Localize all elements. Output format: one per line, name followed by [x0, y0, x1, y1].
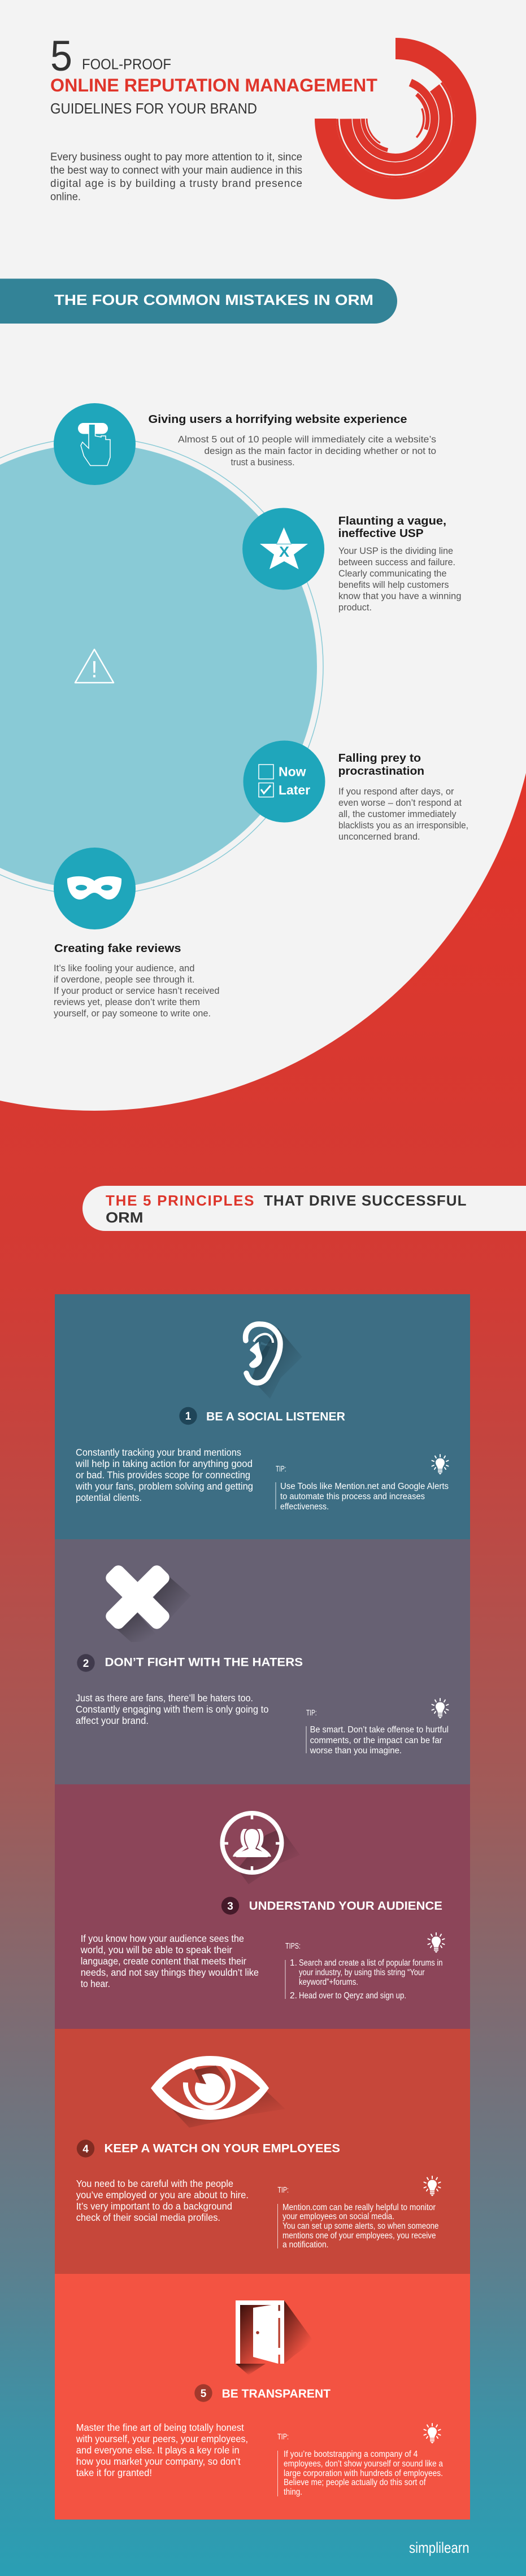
- tip 5: Believe me; people actually do this sort of: [284, 2478, 426, 2487]
- tips 3: TIPS:: [285, 1942, 301, 1951]
- mistake 4: fake reviews: reviews yet, please don’t write them: [54, 997, 200, 1007]
- tips 3: [285, 1933, 444, 2001]
- tip 5: employees, don’t show yourself or sound like a: [284, 2459, 443, 2469]
- icon: red concentric arcs: [325, 49, 466, 189]
- tip 2: worse than you imagine.: [310, 1746, 402, 1756]
- mistake 4: fake reviews: if overdone, people see through it.: [54, 974, 194, 985]
- tip 5: [277, 2424, 443, 2497]
- tip 1: Use Tools like Mention.net and Google Alerts: [280, 1482, 449, 1491]
- big light-blue circle: [0, 444, 317, 889]
- mistake 4: fake reviews: Creating fake reviews: [54, 942, 181, 955]
- tip 4: [277, 2176, 441, 2250]
- mistake 3: procrastination: even worse – don’t respond at: [338, 797, 462, 808]
- tip 2: comments, or the impact can be far: [310, 1736, 442, 1745]
- panel: understand your audience: [55, 1784, 470, 2029]
- intro text: the best way to connect with your main audience in this: [50, 165, 302, 176]
- body 4: It’s very important to do a background: [76, 2200, 232, 2212]
- section banner: four common mistakes: THE FOUR COMMON MISTAKES IN ORM: [54, 291, 373, 308]
- body 1: potential clients.: [76, 1492, 142, 1503]
- icon circle: now later checkboxes: Later: [279, 783, 310, 797]
- body 4: You need to be careful with the people: [76, 2178, 233, 2189]
- mistake 2: vague USP: product.: [338, 602, 372, 613]
- mistake 1: website experience: Giving users a horrifying website experience: [148, 413, 407, 426]
- title: ONLINE REPUTATION MANAGEMENT: [50, 75, 377, 95]
- body 1: will help in taking action for anything good: [75, 1458, 253, 1469]
- number badge 2: [77, 1654, 95, 1672]
- tips 3: Search and create a list of popular forums in: [299, 1958, 443, 1968]
- body 2: Constantly engaging with them is only going to: [76, 1704, 269, 1715]
- title: [50, 32, 377, 117]
- title: GUIDELINES FOR YOUR BRAND: [50, 100, 257, 117]
- title: 5: [50, 32, 72, 80]
- number badge 1: 1: [185, 1411, 192, 1422]
- mistake 2: vague USP: benefits will help customers: [338, 579, 449, 590]
- mistake 3: procrastination: [338, 752, 468, 842]
- body 2: affect your brand.: [76, 1715, 149, 1726]
- body 3: needs, and not say things they wouldn’t like: [81, 1967, 259, 1978]
- light upper background: [0, 0, 526, 1111]
- number badge 1: [179, 1407, 197, 1425]
- body 4: [76, 2178, 249, 2223]
- mistake 4: fake reviews: If your product or service hasn’t received: [54, 985, 219, 996]
- icon: open door: [236, 2300, 314, 2375]
- mistake 1: website experience: design as the main factor in deciding whether or not to: [205, 446, 436, 456]
- tip 2: TIP:: [306, 1709, 316, 1718]
- icon: target audience: [221, 1813, 300, 1884]
- icon: warning triangle: [75, 649, 114, 683]
- outer ring of big circle: [0, 438, 323, 895]
- tip 1: TIP:: [276, 1465, 286, 1474]
- mistake 3: procrastination: procrastination: [338, 765, 424, 778]
- tips 3: Head over to Qeryz and sign up.: [299, 1991, 406, 2001]
- tip 5: large corporation with hundreds of employees.: [284, 2469, 443, 2478]
- mistake 2: vague USP: Clearly communicating the: [338, 568, 446, 579]
- title: FOOL-PROOF: [82, 55, 171, 72]
- tip 5: thing.: [284, 2487, 302, 2497]
- number badge 5: [194, 2384, 212, 2402]
- section banner: five principles: THAT DRIVE SUCCESSFUL: [264, 1192, 467, 1209]
- body 5: how you market your company, so don’t: [76, 2456, 241, 2467]
- body 4: check of their social media profiles.: [76, 2212, 220, 2223]
- tips 3: 1.: [290, 1958, 297, 1968]
- number badge 4: 4: [82, 2143, 89, 2155]
- body 5: Master the fine art of being totally honest: [76, 2422, 244, 2433]
- tip 4: You can set up some alerts, so when someone: [282, 2221, 438, 2231]
- tip 2: Be smart. Don’t take offense to hurtful: [310, 1725, 449, 1735]
- number badge 2: 2: [83, 1658, 89, 1670]
- body 3: If you know how your audience sees the: [81, 1933, 244, 1944]
- heading 2: DON’T FIGHT WITH THE HATERS: [105, 1656, 303, 1669]
- body 5: with yourself, your peers, your employees,: [76, 2433, 248, 2444]
- icon: warning triangle: !: [91, 656, 98, 682]
- tips 3: your industry, by using this string “Your: [299, 1968, 425, 1977]
- body 5: take it for granted!: [76, 2467, 152, 2478]
- section banner: five principles: [82, 1186, 526, 1231]
- body 3: world, you will be able to speak their: [80, 1944, 232, 1955]
- intro text: online.: [50, 191, 81, 203]
- mistake 1: website experience: [148, 413, 436, 468]
- panel: be a social listener: [55, 1294, 470, 1539]
- icon circle: mask: [54, 848, 136, 929]
- heading 1: BE A SOCIAL LISTENER: [206, 1409, 345, 1423]
- body 1: with your fans, problem solving and getting: [75, 1481, 253, 1492]
- number badge 3: [221, 1897, 239, 1915]
- body 2: [76, 1692, 269, 1726]
- mistake 3: procrastination: Falling prey to: [338, 752, 421, 765]
- mistake 4: fake reviews: yourself, or pay someone to write one.: [54, 1008, 211, 1019]
- tip 4: mentions one of your employees, you receive: [282, 2231, 436, 2241]
- tip 4: your employees on social media.: [282, 2212, 394, 2221]
- body 5: [76, 2422, 248, 2478]
- body 4: you’ve employed or you are about to hire.: [76, 2189, 249, 2200]
- heading 4: KEEP A WATCH ON YOUR EMPLOYEES: [104, 2141, 340, 2155]
- section banner: four common mistakes: [0, 279, 397, 324]
- icon circle: star with X: X: [279, 543, 290, 560]
- body 3: language, create content that meets their: [81, 1955, 246, 1967]
- tip 1: effectiveness.: [280, 1502, 329, 1512]
- icon circle: star with X: [242, 508, 324, 590]
- tip 5: TIP:: [277, 2433, 289, 2442]
- panel: keep a watch on your employees: [55, 2029, 470, 2274]
- section banner: five principles: THE 5 PRINCIPLES: [106, 1192, 254, 1209]
- body 5: and everyone else. It plays a key role in: [76, 2444, 240, 2456]
- tip 4: a notification.: [282, 2240, 329, 2250]
- icon: X mark: [103, 1563, 191, 1642]
- panel: don't fight with the haters: [55, 1539, 470, 1784]
- tip 5: If you’re bootstrapping a company of 4: [284, 2450, 418, 2459]
- body 1: or bad. This provides scope for connecting: [76, 1469, 250, 1481]
- mistake 3: procrastination: unconcerned brand.: [338, 831, 420, 842]
- mistake 2: vague USP: Your USP is the dividing line: [338, 545, 453, 556]
- mistake 4: fake reviews: It’s like fooling your audience, and: [54, 963, 194, 973]
- icon: eye: [151, 2056, 285, 2128]
- tip 4: TIP:: [277, 2186, 289, 2195]
- number badge 5: 5: [201, 2388, 207, 2400]
- mistake 3: procrastination: all, the customer immediately: [338, 809, 457, 819]
- mistake 1: website experience: Almost 5 out of 10 people will immediately cite a website’s: [178, 434, 436, 445]
- mistake 2: vague USP: Flaunting a vague,: [338, 514, 446, 527]
- mistake 2: vague USP: [338, 514, 461, 613]
- tip 1: to automate this process and increases: [280, 1492, 425, 1501]
- body 2: Just as there are fans, there’ll be haters too.: [76, 1692, 253, 1704]
- tips 3: 2.: [290, 1991, 297, 2001]
- intro text: Every business ought to pay more attention to it, since: [50, 151, 302, 163]
- tips 3: keyword”+forums.: [299, 1977, 358, 1987]
- heading 5: BE TRANSPARENT: [222, 2387, 331, 2400]
- icon circle: now later checkboxes: [243, 741, 325, 822]
- mistake 3: procrastination: If you respond after days, or: [338, 786, 454, 797]
- tip 4: Mention.com can be really helpful to monitor: [282, 2203, 436, 2212]
- number badge 4: [77, 2140, 94, 2158]
- icon: ear: [246, 1324, 302, 1399]
- body 3: [80, 1933, 259, 1989]
- body 1: [75, 1447, 253, 1503]
- mistake 1: website experience: trust a business.: [231, 457, 295, 468]
- body 1: Constantly tracking your brand mentions: [76, 1447, 241, 1458]
- body 3: to hear.: [81, 1978, 110, 1989]
- heading 3: UNDERSTAND YOUR AUDIENCE: [249, 1899, 442, 1913]
- mistake 2: vague USP: know that you have a winning: [338, 591, 461, 601]
- tip 2: [306, 1699, 449, 1756]
- number badge 3: 3: [227, 1901, 233, 1913]
- tip 1: [276, 1455, 449, 1512]
- mistake 2: vague USP: ineffective USP: [338, 527, 424, 540]
- logo: simplilearn: simplilearn: [409, 2539, 470, 2556]
- mistake 3: procrastination: blacklists you as an irresponsible,: [338, 820, 468, 831]
- section banner: five principles: ORM: [106, 1209, 144, 1226]
- intro text: [50, 151, 302, 203]
- icon circle: hand pressing button: [54, 403, 136, 485]
- icon circle: now later checkboxes: Now: [279, 765, 306, 779]
- mistake 2: vague USP: between success and failure.: [338, 557, 455, 567]
- panel: be transparent: [55, 2274, 470, 2520]
- mistake 4: fake reviews: [54, 942, 219, 1019]
- intro text: digital age is by building a trusty brand presence: [50, 178, 302, 190]
